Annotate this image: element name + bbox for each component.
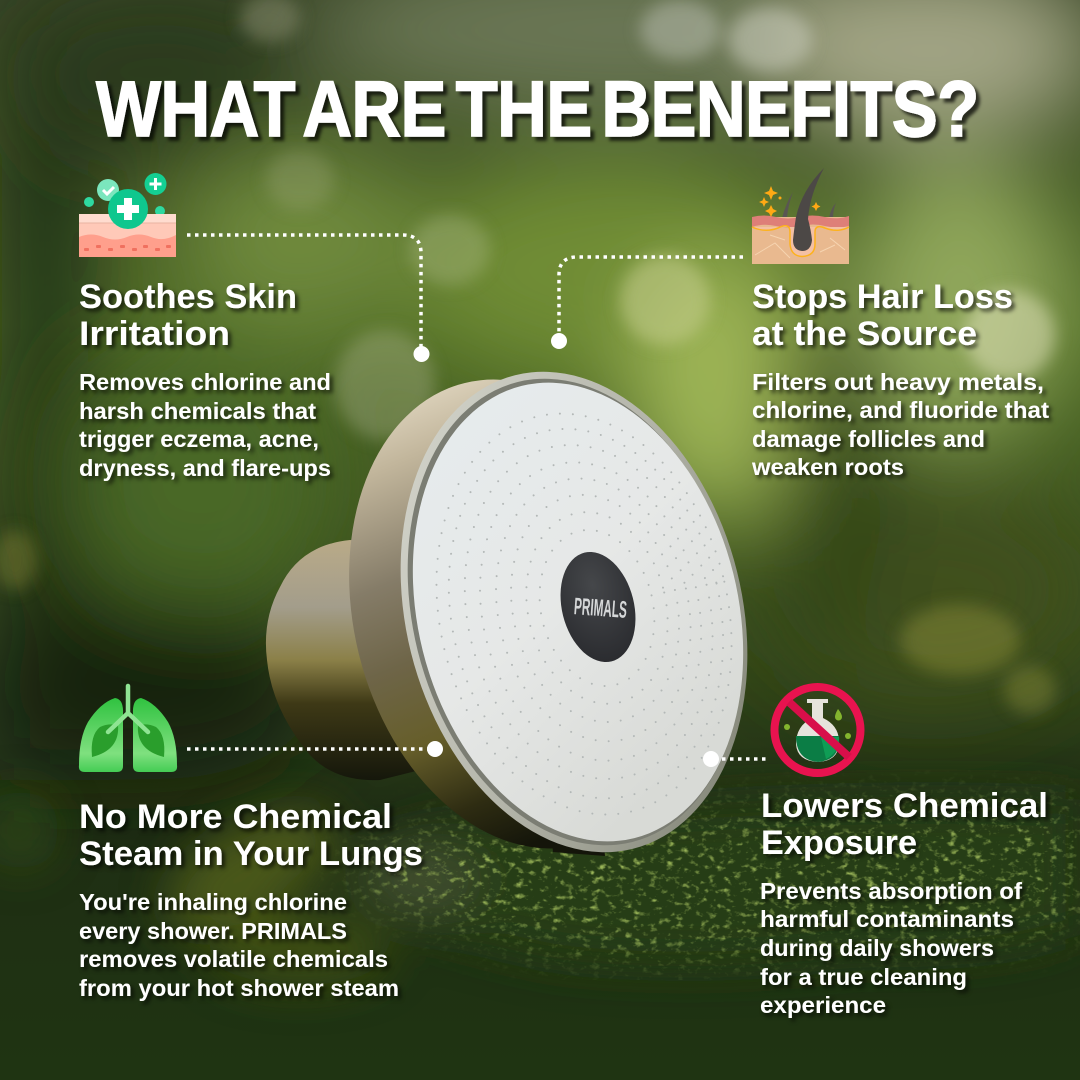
title: WHAT ARE THE BENEFITS? xyxy=(96,65,979,153)
connector: hair loss xyxy=(551,257,743,349)
icon: no chemicals flask xyxy=(774,687,860,773)
text: lowers chemical exposure xyxy=(760,878,1022,1018)
heading: lowers chemical exposure xyxy=(761,787,1048,862)
product neck xyxy=(266,540,420,780)
heading: stops hair loss: Stops Hair Loss xyxy=(752,278,1013,316)
heading: soothes skin irritation: Irritation xyxy=(79,315,230,353)
text: soothes skin irritation: trigger eczema, acne, xyxy=(79,426,319,452)
text: chemical steam: You're inhaling chlorine xyxy=(79,889,347,915)
icon: hair follicle xyxy=(752,168,849,264)
text: lowers chemical exposure: Prevents absorption of xyxy=(760,878,1022,904)
product nozzle dots xyxy=(398,384,770,844)
text: stops hair loss: damage follicles and xyxy=(752,426,985,452)
text: lowers chemical exposure: experience xyxy=(760,992,886,1018)
product: shower filter xyxy=(266,335,796,889)
text: lowers chemical exposure: for a true cleaning xyxy=(760,964,967,990)
product face xyxy=(366,347,790,877)
product rim xyxy=(352,335,796,889)
product logo badge xyxy=(550,544,646,670)
text: chemical steam: removes volatile chemicals xyxy=(79,946,388,972)
moss mound xyxy=(0,770,1080,985)
heading: chemical steam xyxy=(79,798,423,873)
heading: lowers chemical exposure: Lowers Chemical xyxy=(761,787,1048,825)
connector: chemical steam xyxy=(187,741,443,757)
heading: stops hair loss: at the Source xyxy=(752,315,977,353)
connector: skin irritation xyxy=(187,235,430,362)
text: lowers chemical exposure: during daily showers xyxy=(760,935,994,961)
text: soothes skin irritation xyxy=(79,369,331,481)
product body xyxy=(301,342,743,886)
text: chemical steam xyxy=(79,889,399,1001)
product logo badge: PRIMALS xyxy=(573,593,628,624)
heading: lowers chemical exposure: Exposure xyxy=(761,824,917,862)
text: stops hair loss: weaken roots xyxy=(751,454,904,480)
text: soothes skin irritation: harsh chemicals that xyxy=(79,398,316,424)
text: stops hair loss: Filters out heavy metals, xyxy=(752,369,1044,395)
text: soothes skin irritation: dryness, and flare-ups xyxy=(79,455,331,481)
text: chemical steam: every shower. PRIMALS xyxy=(79,918,347,944)
text: soothes skin irritation: Removes chlorine and xyxy=(79,369,331,395)
heading: chemical steam: No More Chemical xyxy=(79,798,392,836)
text: stops hair loss xyxy=(751,369,1049,480)
heading: soothes skin irritation xyxy=(79,278,297,353)
icon: green lungs xyxy=(79,686,177,772)
text: stops hair loss: chlorine, and fluoride that xyxy=(752,397,1049,423)
heading: stops hair loss xyxy=(752,278,1013,353)
heading: chemical steam: Steam in Your Lungs xyxy=(79,835,423,873)
icon: skin with green cross xyxy=(79,173,176,257)
text: lowers chemical exposure: harmful contaminants xyxy=(760,906,1014,932)
text: chemical steam: from your hot shower steam xyxy=(79,975,399,1001)
connector: chemical exposure xyxy=(703,751,770,767)
heading: soothes skin irritation: Soothes Skin xyxy=(79,278,297,316)
